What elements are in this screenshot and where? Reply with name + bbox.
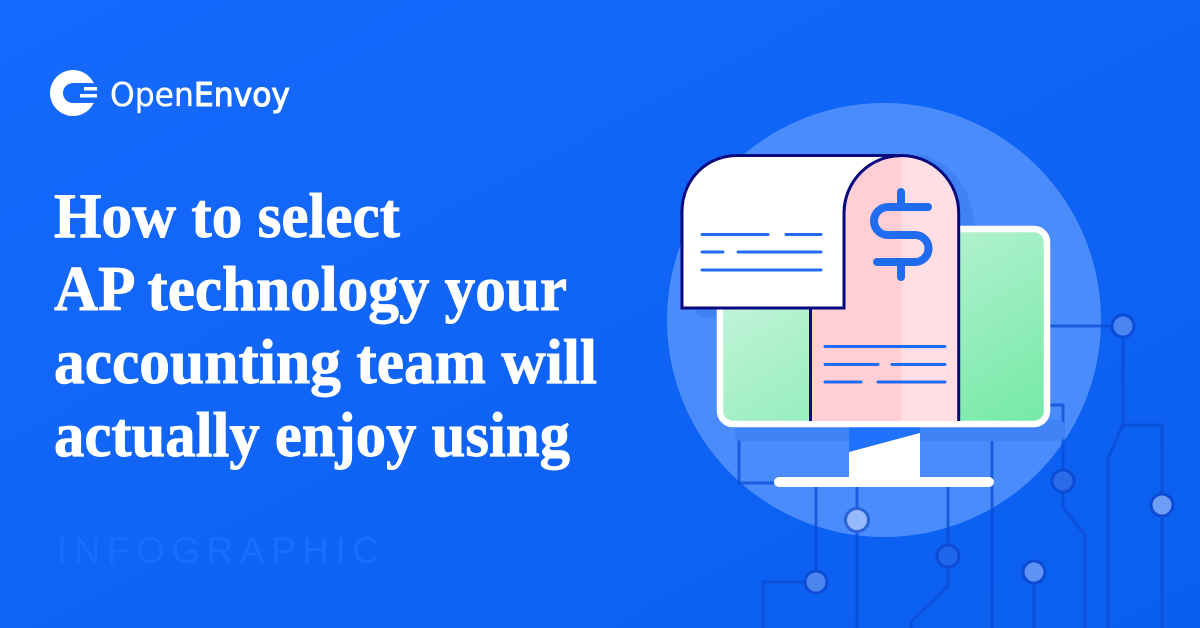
- monitor base: [774, 477, 994, 487]
- light fold: [902, 156, 959, 421]
- circuit lines: [739, 326, 1162, 628]
- node: [805, 571, 827, 593]
- title line 3: accounting team will: [54, 327, 597, 397]
- node: [1112, 315, 1134, 337]
- title line 4: actually enjoy using: [54, 400, 570, 470]
- sheet outline: [810, 155, 959, 421]
- category label: INFOGRAPHIC: [57, 530, 379, 571]
- dollar sign: [874, 192, 928, 277]
- node: [846, 508, 868, 532]
- node: [1052, 470, 1074, 492]
- title line 2: AP technology your: [54, 254, 567, 324]
- invoice roll: [682, 155, 959, 421]
- background circle: [667, 103, 1101, 537]
- pink sheet: [810, 155, 959, 421]
- logo mark: [50, 70, 101, 116]
- title: [54, 181, 597, 470]
- monitor: [720, 229, 1047, 487]
- invoice text lines: [825, 346, 945, 382]
- logo: [50, 70, 290, 116]
- white paper flap: [682, 156, 902, 308]
- logo wordmark: OpenEnvoy: [110, 75, 290, 114]
- flap text lines: [702, 234, 821, 270]
- title line 1: How to select: [54, 181, 400, 251]
- soft shadows: [696, 155, 1065, 441]
- circuit nodes: [805, 315, 1173, 593]
- node: [1151, 494, 1173, 516]
- monitor stand: [849, 433, 920, 479]
- monitor screen: [720, 229, 1047, 424]
- node: [937, 545, 959, 567]
- monitor stand neck: [849, 427, 920, 479]
- node: [1023, 561, 1045, 583]
